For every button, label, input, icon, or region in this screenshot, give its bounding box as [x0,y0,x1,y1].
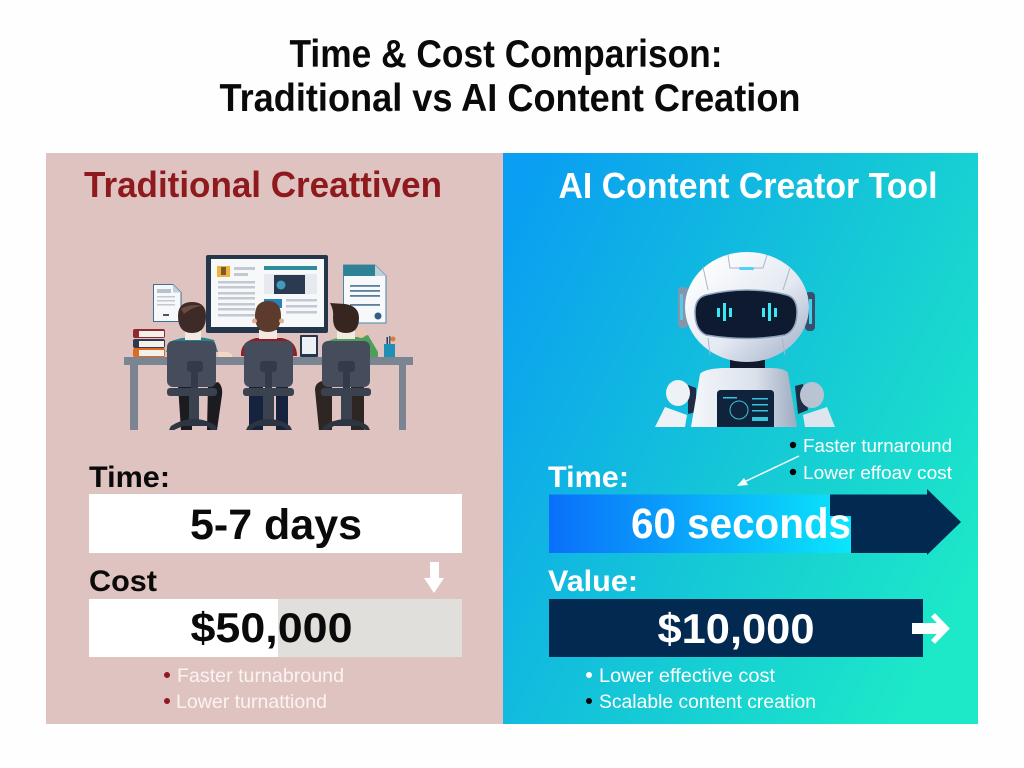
annotation arrow [737,456,799,486]
bullet list: traditional: Faster turnabround [177,665,344,687]
label: time: Time: [548,461,629,494]
heading: traditional: Traditional Creattiven [84,164,442,205]
desk [124,357,413,430]
cost bar: $50,000 [190,604,352,651]
value bar: $10,000 [658,605,814,652]
label: value: Value: [548,565,638,598]
bullet list: lower [586,666,816,713]
person left [166,302,232,430]
person right [315,303,378,430]
time bar [89,494,462,553]
title: Traditional vs AI Content Creation [220,77,800,120]
cost bar [89,599,462,657]
books [133,329,165,357]
robot head [685,252,809,362]
label: time: Time: [89,461,170,494]
robot ears [678,287,815,331]
label: cost: Cost [89,565,157,598]
bullet list: lower: Lower effective cost [599,666,776,687]
document left [154,284,181,322]
bullet list: upper: Faster turnaround [803,435,952,456]
bullet list: lower: Scalable content creation [599,692,816,713]
robot top light [739,267,754,270]
bullet list: upper [790,435,952,483]
robot arms [655,380,835,427]
value bar [549,599,923,657]
illustration: robot [655,252,835,427]
robot eyes [717,303,777,321]
robot neck [730,358,765,373]
heading: ai tool: AI Content Creator Tool [558,165,938,206]
title [220,33,800,120]
illustration: team at desk [124,255,413,430]
title: Time & Cost Comparison: [290,33,722,76]
bullet list: traditional: Lower turnattiond [176,691,327,713]
time arrow bar [549,489,961,555]
bullet list: upper: Lower effoav cost [803,462,952,483]
time arrow bar: 60 seconds [631,500,851,548]
icon: down arrow [424,562,444,593]
tablet [300,335,318,357]
pen cup [384,336,396,357]
bullet list: traditional [164,665,344,713]
person middle [241,301,297,430]
panel: ai tool [503,153,978,724]
time bar: 5-7 days [190,501,362,549]
robot head seams [703,255,790,355]
robot visor [695,290,797,338]
panel: traditional [46,153,504,724]
icon: right arrow [912,615,946,642]
robot body [691,368,797,427]
monitor [206,255,328,333]
robot chest screen [717,390,774,427]
document right [344,265,386,323]
